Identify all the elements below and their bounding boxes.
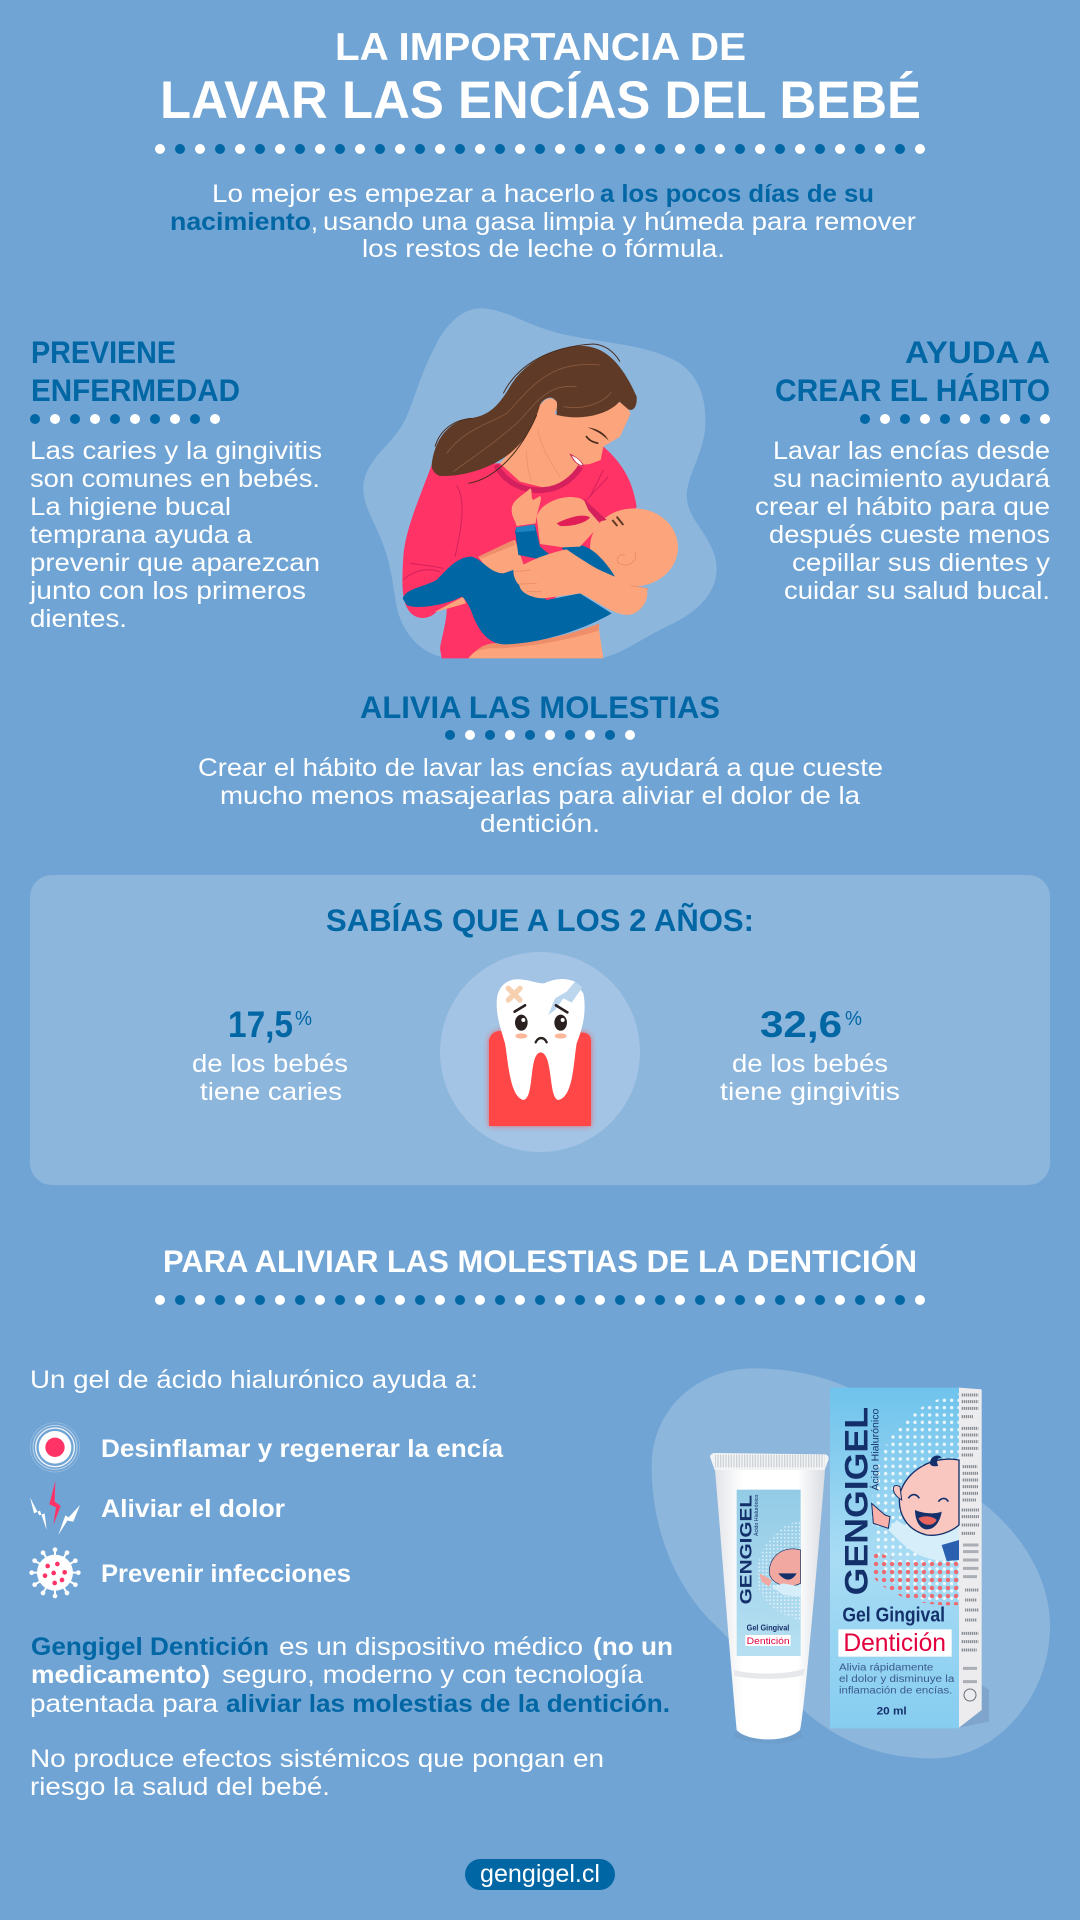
panel: previene enfermedad — [29, 334, 322, 633]
mother's belly — [468, 625, 603, 658]
mother's neck and face — [500, 402, 631, 488]
tube brand name: GENGIGEL — [737, 1495, 756, 1604]
text: gengigel description — [30, 1633, 673, 1718]
product background blob — [652, 1368, 1050, 1758]
intro text — [170, 180, 916, 263]
heading: sabias que: SABÍAS QUE A LOS 2 AÑOS: — [326, 902, 754, 938]
icon: sad tooth — [440, 952, 640, 1152]
heading: previene enfermedad: PREVIENE — [31, 334, 176, 370]
label: desinflamar: Desinflamar y regenerar la encía — [101, 1435, 504, 1463]
mother's shirt — [402, 447, 637, 658]
text: efectos sistemicos — [30, 1745, 604, 1801]
baby mascot — [872, 1456, 959, 1561]
baby face — [612, 517, 623, 526]
text: efectos sistemicos: riesgo la salud del bebé. — [30, 1773, 330, 1801]
intro text: usando una gasa limpia y húmeda para remover — [323, 208, 916, 236]
stat: gingivitis: 32,6 — [760, 1004, 842, 1045]
text: gengigel description: seguro, moderno y con tecnología — [222, 1661, 643, 1689]
text: gengigel description: Gengigel Dentición — [31, 1633, 269, 1661]
product blob and packaging — [652, 1368, 1050, 1758]
stat: caries: de los bebés — [192, 1050, 348, 1078]
label: prevenir: Prevenir infecciones — [101, 1560, 351, 1588]
text: alivia las molestias: dentición. — [480, 810, 600, 838]
intro text: Lo mejor es empezar a hacerlo — [212, 180, 595, 208]
stat: gingivitis: tiene gingivitis — [720, 1078, 900, 1106]
text: gel intro: Un gel de ácido hialurónico ayuda a: — [30, 1366, 478, 1394]
icon: pain bolts — [30, 1481, 80, 1535]
mother's lower arm — [435, 597, 466, 612]
text: crear el habito — [755, 437, 1051, 605]
panel: alivia las molestias — [198, 689, 883, 838]
intro text: los restos de leche o fórmula. — [362, 235, 725, 263]
text: gengigel description: patentada para — [30, 1690, 218, 1718]
text: crear el habito: cuidar su salud bucal. — [784, 577, 1050, 605]
baby head — [590, 508, 678, 586]
stat: gingivitis — [720, 1004, 900, 1106]
text: alivia las molestias: Crear el hábito de lavar las encías ayudará a que cueste — [198, 754, 883, 782]
label: aliviar: Aliviar el dolor — [101, 1495, 285, 1523]
heading: previene enfermedad: ENFERMEDAD — [31, 372, 240, 408]
heading: previene enfermedad — [31, 334, 240, 408]
text: alivia las molestias — [198, 754, 883, 838]
box product name: Gel Gingival — [842, 1605, 945, 1627]
heading: crear el habito — [775, 334, 1050, 408]
illustration: mother and baby — [363, 308, 717, 658]
text: crear el habito: después cueste menos — [769, 521, 1050, 549]
box front: Dentición — [843, 1629, 946, 1657]
text: gengigel description: es un dispositivo médico — [279, 1633, 583, 1661]
title: LAVAR LAS ENCÍAS DEL BEBÉ — [160, 70, 921, 130]
intro text: nacimiento — [170, 208, 311, 236]
box shadow — [959, 1685, 989, 1728]
box front: 20 ml — [877, 1706, 907, 1718]
tube: Dentición — [747, 1636, 790, 1646]
text: efectos sistemicos: No produce efectos sistémicos que pongan en — [30, 1745, 604, 1773]
text: gengigel description: (no un — [593, 1633, 673, 1661]
text: previene enfermedad: junto con los primeros — [29, 577, 306, 605]
box front: Alivia rápidamente — [839, 1663, 934, 1674]
text: previene enfermedad: Las caries y la gingivitis — [30, 437, 322, 465]
illustration background blob — [363, 308, 717, 658]
website pill: gengigel.cl — [480, 1860, 600, 1888]
collar — [496, 465, 581, 490]
stat: caries: % — [295, 1008, 312, 1030]
mother's hand at breast — [537, 497, 600, 547]
text: previene enfermedad — [29, 437, 322, 633]
hair — [432, 346, 637, 476]
heading: alivia las molestias: ALIVIA LAS MOLESTIAS — [360, 689, 720, 725]
text: previene enfermedad: dientes. — [30, 605, 127, 633]
text: crear el habito: su nacimiento ayudará — [773, 465, 1050, 493]
baby body — [403, 557, 612, 644]
ear — [539, 398, 557, 421]
panel: sabias que — [30, 875, 1050, 1185]
text: crear el habito: cepillar sus dientes y — [792, 549, 1051, 577]
mother's arm holding baby — [513, 549, 647, 615]
text: crear el habito: crear el hábito para que — [755, 493, 1050, 521]
text: previene enfermedad: son comunes en bebés. — [30, 465, 320, 493]
heading: crear el habito: CREAR EL HÁBITO — [775, 372, 1050, 408]
panel: ayuda a crear el habito — [755, 334, 1051, 605]
stat: caries: 17,5 — [228, 1004, 293, 1045]
text: alivia las molestias: mucho menos masajearlas para aliviar el dolor de la — [220, 782, 860, 810]
tube: Ácido Hialurónico — [753, 1495, 760, 1536]
text: previene enfermedad: temprana ayuda a — [30, 521, 252, 549]
tube baby — [769, 1549, 801, 1586]
stat: caries — [192, 1004, 348, 1106]
tube — [710, 1453, 829, 1744]
tube product name: Gel Gingival — [747, 1624, 789, 1633]
intro text: , — [311, 208, 318, 236]
box front — [830, 1388, 959, 1728]
icon: virus — [29, 1547, 81, 1598]
heading: para aliviar: PARA ALIVIAR LAS MOLESTIAS DE LA DENTICIÓN — [163, 1243, 917, 1279]
stat: gingivitis: de los bebés — [732, 1050, 888, 1078]
baby sleeve and hand — [515, 525, 551, 559]
text: gengigel description: aliviar las molestias de la dentición. — [226, 1690, 670, 1718]
text: previene enfermedad: prevenir que aparezcan — [30, 549, 320, 577]
stat: gingivitis: % — [845, 1008, 862, 1030]
text: gengigel description: medicamento) — [31, 1661, 210, 1689]
icon: inflammation target — [30, 1423, 80, 1472]
text: previene enfermedad: La higiene bucal — [30, 493, 231, 521]
benefit list — [29, 1423, 504, 1598]
box front: inflamación de encías. — [839, 1685, 952, 1696]
box brand name: GENGIGEL — [838, 1407, 874, 1595]
stat: caries: tiene caries — [200, 1078, 342, 1106]
title: LA IMPORTANCIA DE — [335, 26, 746, 69]
box front: el dolor y disminuye la — [839, 1674, 955, 1685]
title — [160, 26, 921, 130]
box front: Ácido Hialurónico — [871, 1409, 882, 1491]
box side — [959, 1388, 982, 1728]
heading: crear el habito: AYUDA A — [905, 334, 1050, 370]
text: crear el habito: Lavar las encías desde — [773, 437, 1050, 465]
intro text: a los pocos días de su — [600, 180, 874, 208]
face details — [586, 436, 598, 443]
